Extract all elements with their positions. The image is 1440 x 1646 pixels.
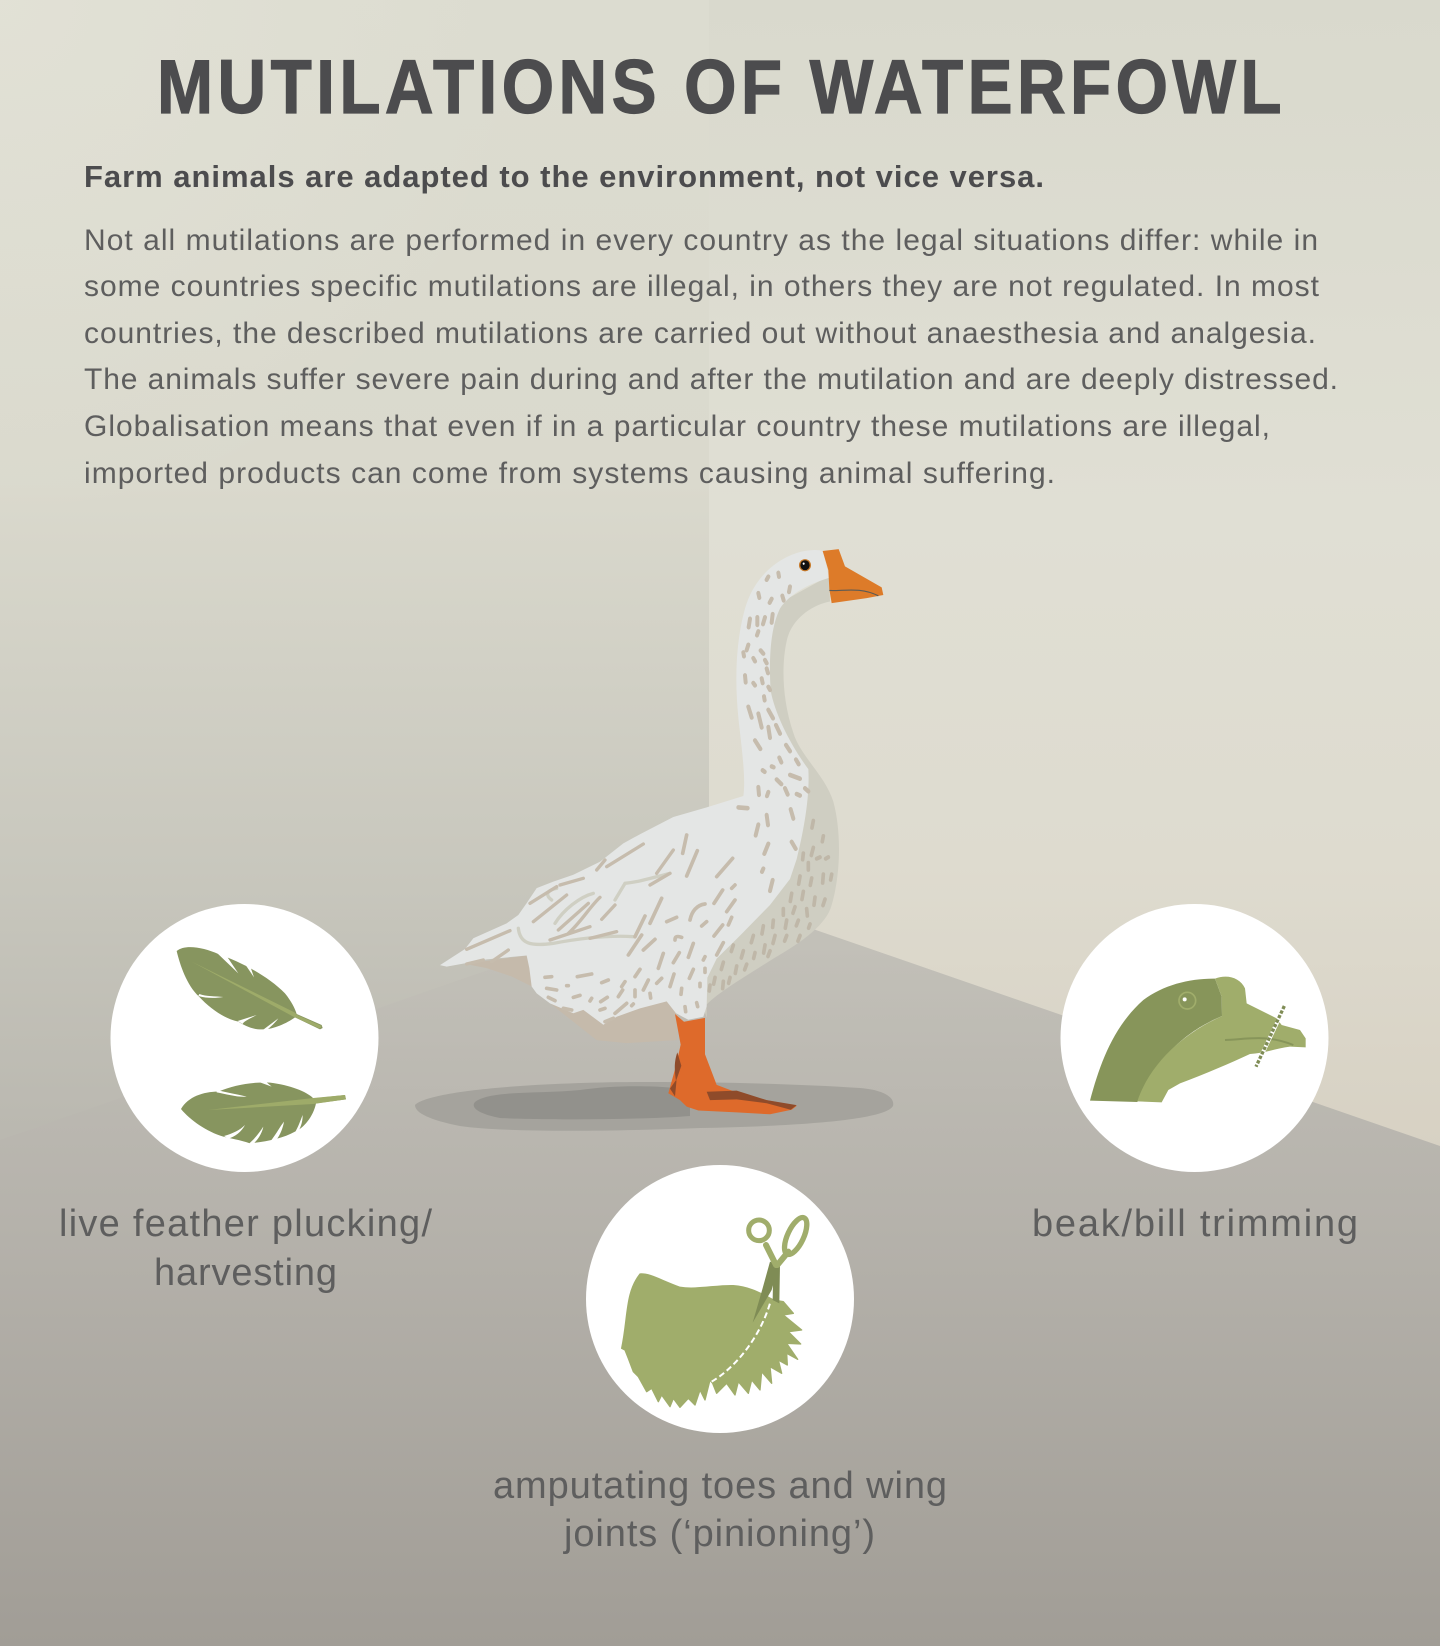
body text block: some countries specific mutilations are illegal, in others they are not regulated. In most xyxy=(84,270,1320,303)
icon: two feathers xyxy=(177,947,346,1144)
body text block: imported products can come from systems causing animal suffering. xyxy=(84,457,1055,490)
goose underparts xyxy=(465,576,839,1043)
goose neck and chest speckles xyxy=(709,573,832,991)
label: pinioning xyxy=(493,1465,947,1555)
title: MUTILATIONS OF WATERFOWL xyxy=(157,45,1286,130)
body text block: Not all mutilations are performed in every country as the legal situations differ: while in xyxy=(84,224,1318,257)
body text block: Globalisation means that even if in a particular country these mutilations are illegal, xyxy=(84,410,1270,443)
subheading: Farm animals are adapted to the environment, not vice versa. xyxy=(84,159,1044,194)
circle panel: feather plucking xyxy=(110,904,378,1172)
icon: goose head with trim line xyxy=(1090,977,1306,1102)
goose eye xyxy=(799,559,811,571)
goose wing and rear plumage markings xyxy=(467,835,735,1022)
label: feather plucking: harvesting xyxy=(154,1252,337,1294)
goose white body xyxy=(440,550,829,1025)
icon: wing with scissors xyxy=(622,1214,811,1407)
label: feather plucking xyxy=(59,1203,432,1294)
goose shadow xyxy=(415,1082,893,1131)
goose beak xyxy=(823,549,883,603)
goose illustration xyxy=(440,549,883,1114)
circle panel: beak trimming xyxy=(1060,904,1328,1172)
label: pinioning: amputating toes and wing xyxy=(493,1465,947,1507)
circle panel: pinioning xyxy=(586,1165,854,1433)
body text block xyxy=(84,224,1338,490)
label: feather plucking: live feather plucking/ xyxy=(59,1203,432,1245)
goose legs xyxy=(668,1014,797,1114)
label: beak trimming: beak/bill trimming xyxy=(1032,1203,1358,1245)
body text block: countries, the described mutilations are carried out without anaesthesia and analgesia. xyxy=(84,317,1316,350)
label: pinioning: joints (‘pinioning’) xyxy=(563,1513,875,1555)
body text block: The animals suffer severe pain during and after the mutilation and are deeply distressed. xyxy=(84,363,1338,396)
